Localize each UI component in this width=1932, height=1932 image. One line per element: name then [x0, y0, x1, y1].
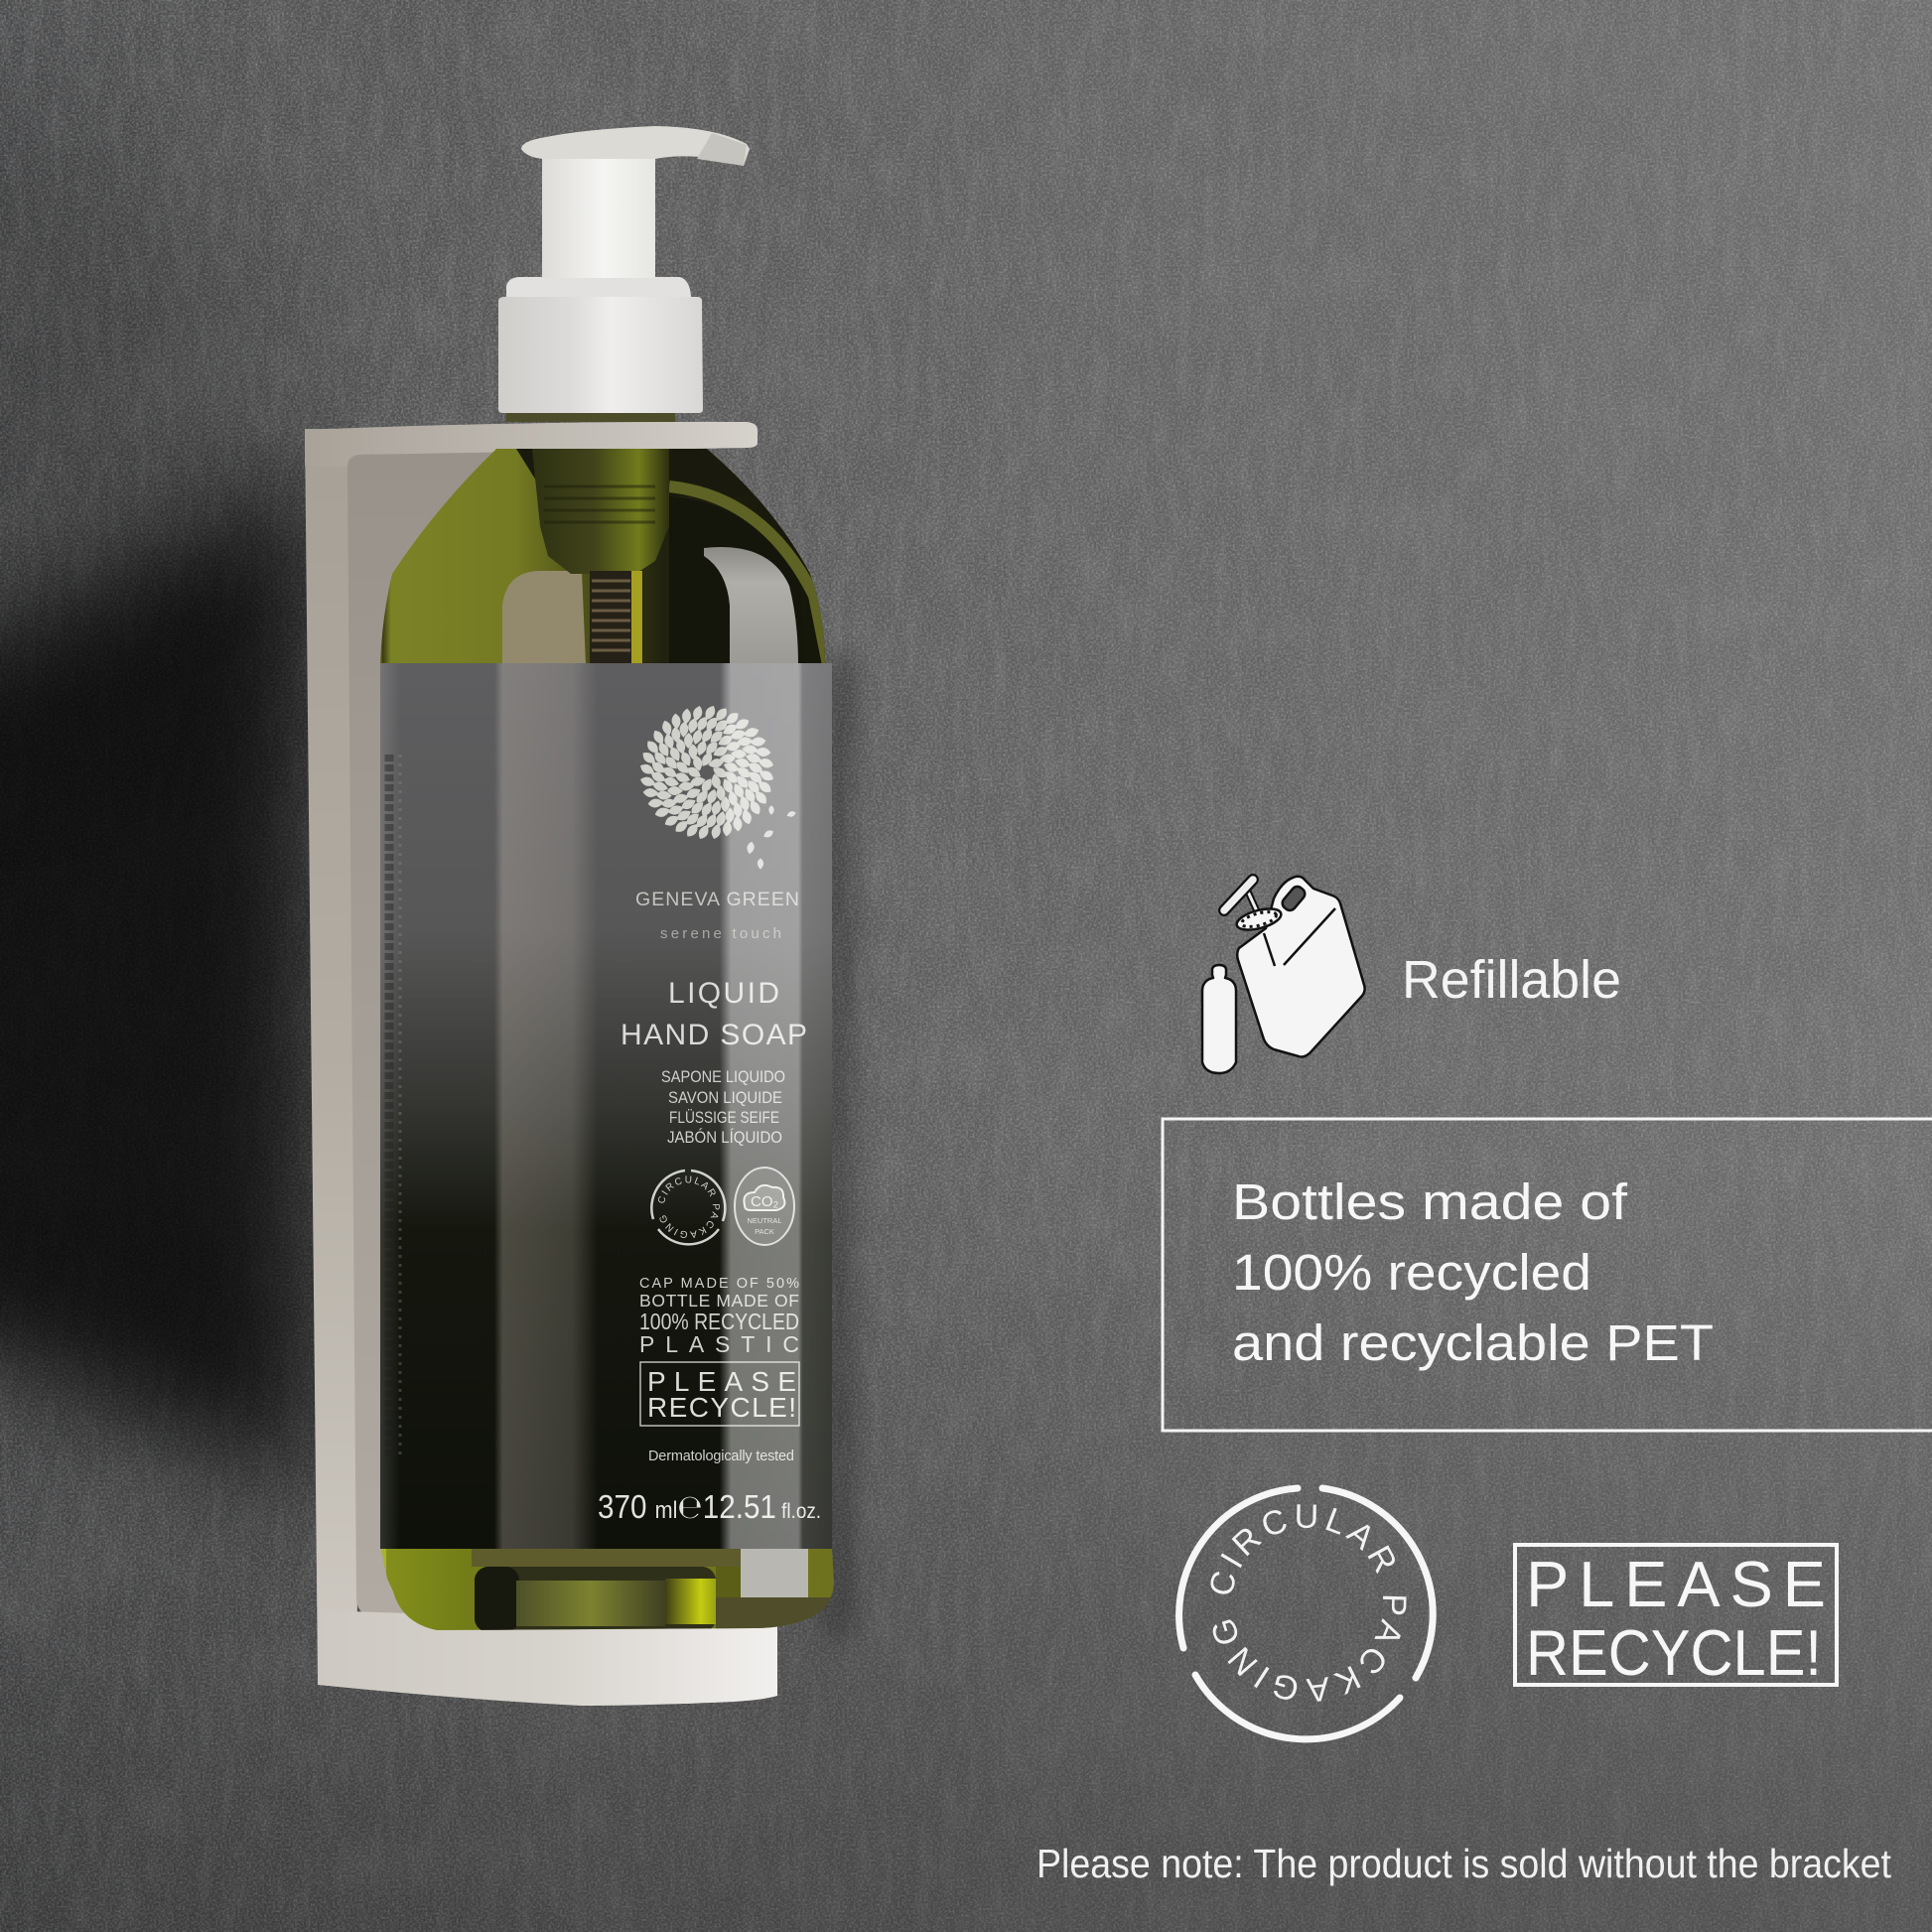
- wall bracket: [305, 422, 777, 1706]
- pump collar upper: [506, 277, 691, 297]
- PET text: [1232, 1173, 1714, 1371]
- circular packaging badge: CIRCULAR PACKAGING: [1211, 1504, 1407, 1702]
- recycled plastic statement: 100% RECYCLED: [639, 1309, 799, 1334]
- translations: SAPONE LIQUIDO: [661, 1067, 785, 1086]
- mini please recycle box: RECYCLE!: [647, 1392, 796, 1423]
- pump collar lower: [498, 297, 703, 413]
- translations: JABÓN LÍQUIDO: [667, 1128, 782, 1147]
- brand name: GENEVA GREEN: [635, 889, 799, 910]
- PET text: Bottles made of: [1232, 1173, 1628, 1230]
- logo flower: [627, 693, 796, 870]
- translations: SAVON LIQUIDE: [668, 1088, 782, 1107]
- circular packaging mini badge: CIRCULAR PACKAGING: [657, 1175, 720, 1238]
- product name line 2: HAND SOAP: [621, 1019, 807, 1051]
- circular packaging badge: [1175, 1485, 1437, 1743]
- right glass highlight: [704, 547, 798, 665]
- bracket column: [305, 429, 357, 1678]
- label: [380, 663, 832, 1549]
- volume: 370 ml℮12.51 fl.oz.: [598, 1487, 821, 1526]
- please recycle stamp: PLEASE: [1526, 1548, 1826, 1620]
- pump neck inside bottle: [532, 449, 669, 574]
- CO2 neutral pack badge: [735, 1168, 794, 1245]
- small bottle: [1202, 965, 1236, 1073]
- recycled plastic statement: CAP MADE OF 50%: [639, 1276, 799, 1292]
- pump: [498, 126, 750, 422]
- refillable label: Refillable: [1402, 950, 1621, 1010]
- CO2 neutral pack badge: CO₂: [751, 1193, 778, 1210]
- tagline: serene touch: [660, 925, 781, 942]
- bottle: [380, 449, 834, 1630]
- recycled plastic statement: PLASTIC: [639, 1331, 799, 1357]
- left glass highlight: [502, 571, 586, 665]
- product name line 1: LIQUID: [668, 977, 779, 1010]
- dip tube: [590, 571, 643, 665]
- translations: FLÜSSIGE SEIFE: [669, 1108, 779, 1127]
- CO2 neutral pack badge: PACK: [755, 1227, 774, 1236]
- CO2 neutral pack badge: NEUTRAL: [747, 1216, 782, 1225]
- bracket foot: [318, 1610, 777, 1706]
- bracket top plate: [305, 422, 758, 467]
- please recycle stamp: RECYCLE!: [1526, 1616, 1822, 1689]
- refillable icon: [1202, 877, 1365, 1073]
- pump parts: [1248, 892, 1258, 913]
- jug: [1237, 877, 1365, 1056]
- label highlight over print: [720, 663, 832, 1549]
- panel: recycled PET: [1163, 1119, 1932, 1431]
- mini please recycle box: [640, 1362, 799, 1426]
- bottle glass: [377, 447, 839, 1633]
- recycled plastic statement: BOTTLE MADE OF: [639, 1291, 799, 1311]
- recycled plastic statement: [639, 1276, 799, 1357]
- mini please recycle box: PLEASE: [647, 1366, 796, 1397]
- PET text: 100% recycled: [1232, 1244, 1591, 1301]
- pump head: [521, 126, 750, 166]
- translations: [661, 1067, 785, 1147]
- dermatologically tested: Dermatologically tested: [648, 1449, 794, 1464]
- pump stem: [542, 154, 655, 278]
- label side micro print: [385, 755, 393, 1459]
- please recycle stamp: [1515, 1545, 1837, 1689]
- PET text: and recyclable PET: [1232, 1314, 1714, 1371]
- bracket inner panel: [347, 451, 506, 1618]
- bottom glass: [377, 1544, 839, 1633]
